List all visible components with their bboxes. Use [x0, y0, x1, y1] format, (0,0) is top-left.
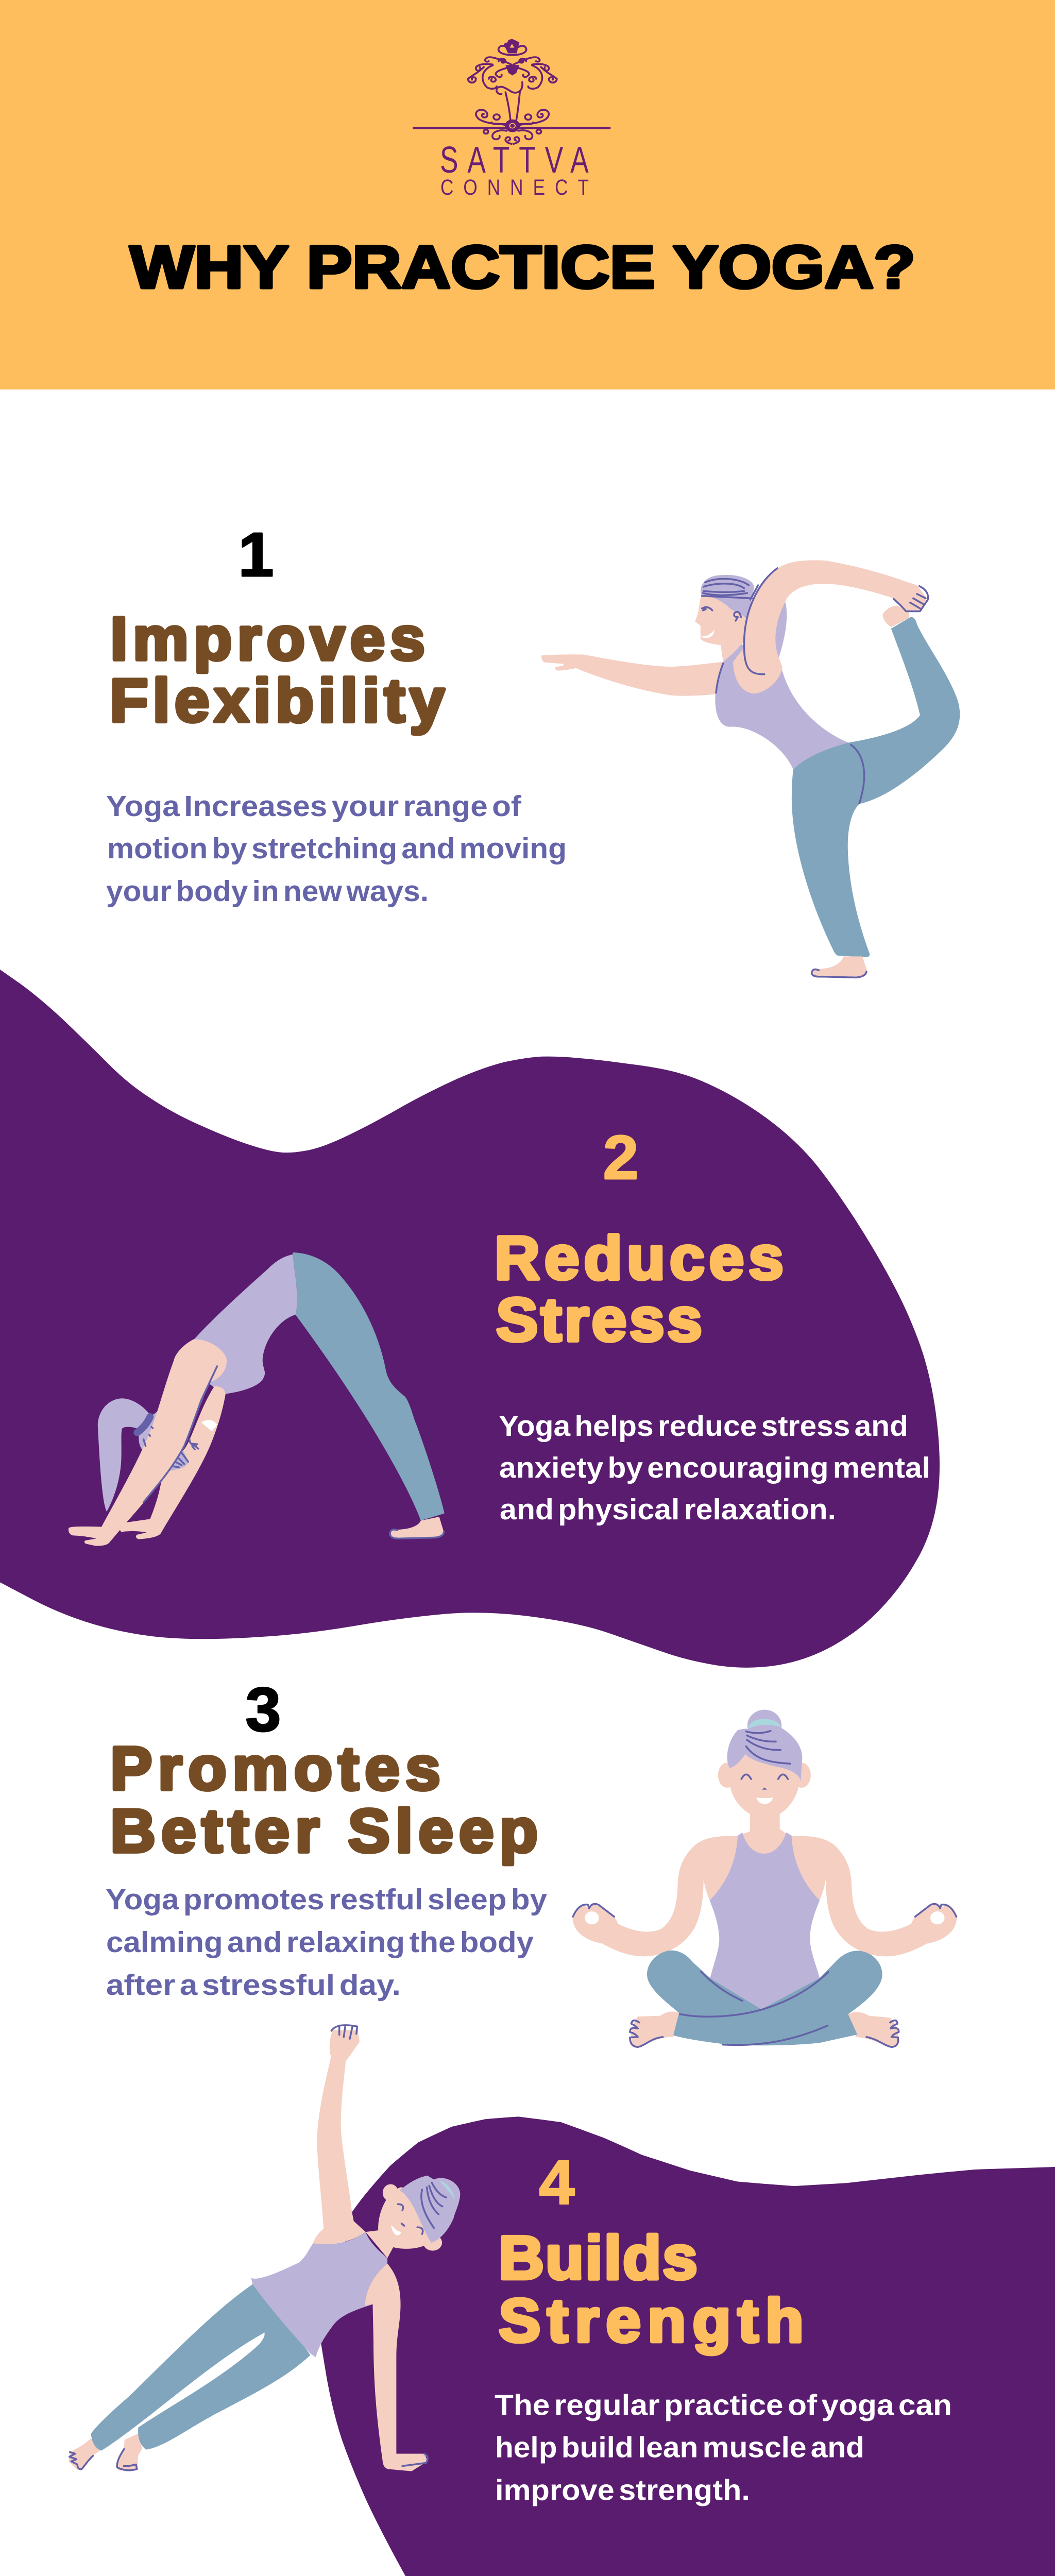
logo wordmark: CONNECT: [440, 175, 589, 200]
body text: [106, 790, 567, 908]
body text: [495, 2389, 952, 2506]
heading: Flexibility: [110, 666, 445, 735]
body text: your body in new ways.: [106, 875, 429, 908]
panel: purple blob behind section 4: [321, 2116, 1055, 2576]
illustration: lotus pose: [573, 1710, 957, 2047]
heading: Improves: [110, 604, 425, 673]
section 4: builds strength: [495, 2147, 952, 2506]
heading: Stress: [496, 1285, 702, 1354]
body text: after a stressful day.: [106, 1969, 401, 2002]
heading: Promotes: [110, 1734, 440, 1803]
title: WHY PRACTICE YOGA?: [130, 234, 915, 301]
illustration: downward dog pose: [69, 1252, 445, 1546]
body text: Yoga promotes restful sleep by: [106, 1884, 547, 1916]
body text: help build lean muscle and: [495, 2431, 864, 2464]
heading: [110, 1734, 538, 1865]
number 4: 4: [539, 2147, 574, 2217]
body text: motion by stretching and moving: [107, 833, 567, 865]
illustration: side plank pose: [69, 2025, 460, 2471]
body text: and physical relaxation.: [500, 1494, 836, 1526]
section 1: improves flexibility: [106, 519, 567, 908]
heading: Builds: [499, 2223, 697, 2292]
number 1: 1: [239, 519, 274, 589]
heading: [110, 604, 445, 735]
body text: Yoga Increases your range of: [106, 790, 522, 823]
number 3: 3: [246, 1674, 281, 1744]
body text: The regular practice of yoga can: [495, 2389, 952, 2421]
heading: Better Sleep: [110, 1797, 538, 1865]
logo: Sattva Connect: [413, 39, 610, 200]
body text: improve strength.: [495, 2474, 750, 2506]
body text: Yoga helps reduce stress and: [499, 1410, 908, 1443]
section 3: promotes better sleep: [106, 1674, 547, 2002]
panel: purple blob behind section 2: [0, 970, 940, 1668]
body text: calming and relaxing the body: [106, 1926, 534, 1959]
section 2: reduces stress: [495, 1122, 930, 1526]
number 2: 2: [603, 1122, 638, 1192]
icon: ornamental tree: [413, 39, 610, 144]
body text: [499, 1410, 930, 1526]
logo wordmark: SATTVA: [440, 140, 589, 181]
heading: [499, 2223, 804, 2355]
heading: Strength: [499, 2286, 804, 2355]
heading: Reduces: [495, 1224, 784, 1292]
logo wordmark: [440, 140, 589, 200]
body text: anxiety by encouraging mental: [499, 1452, 930, 1484]
illustration: dancer pose: [541, 560, 960, 977]
heading: [495, 1224, 784, 1354]
body text: [106, 1884, 547, 2002]
header banner: [0, 0, 1055, 389]
